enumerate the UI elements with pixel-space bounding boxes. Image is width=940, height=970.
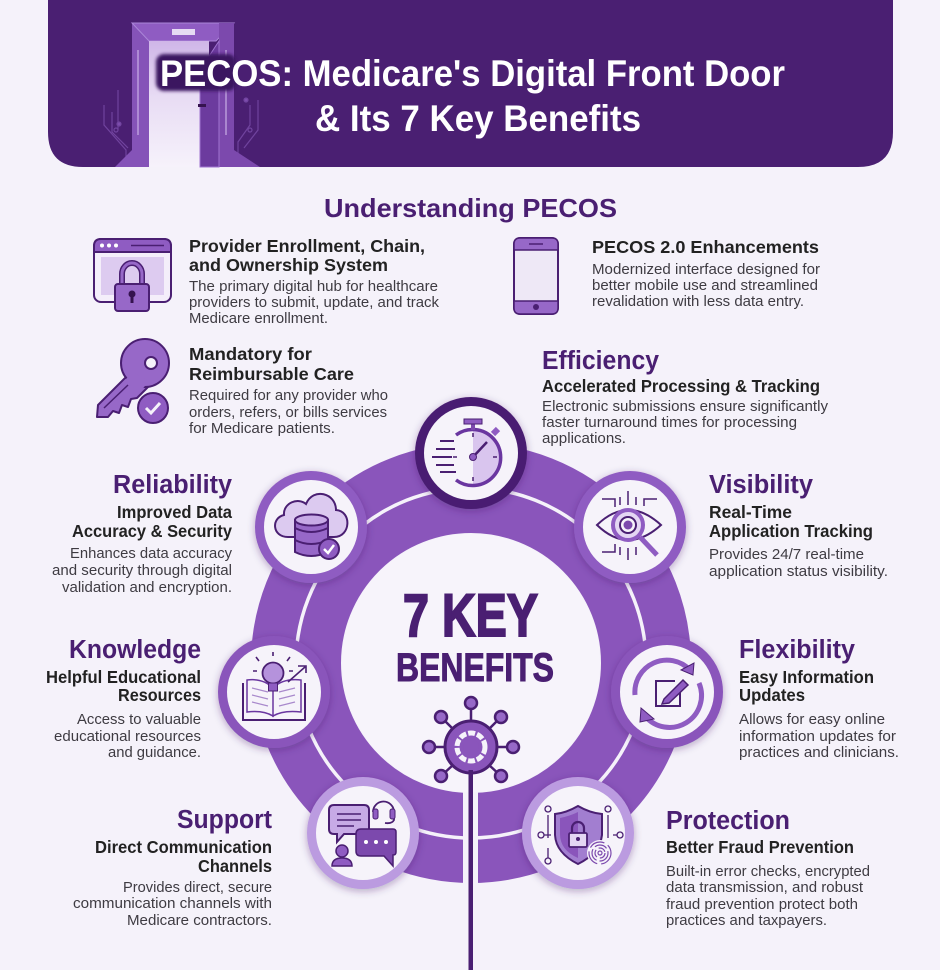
text: flexibility: practices and clinicians. xyxy=(739,745,899,761)
icon: stopwatch xyxy=(432,419,501,486)
text: support: Channels xyxy=(198,856,272,876)
text: protection xyxy=(666,807,870,929)
panel: mandatory for reimbursable care xyxy=(97,339,388,437)
text: knowledge: Knowledge xyxy=(69,636,201,664)
text: provider enrollment: Medicare enrollment. xyxy=(189,311,328,327)
text: reliability: validation and encryption. xyxy=(62,580,232,596)
text: provider enrollment: The primary digital hub for healthcare xyxy=(189,279,438,295)
text: mandatory: Mandatory for xyxy=(189,344,312,364)
text: knowledge: educational resources xyxy=(54,729,201,745)
text: knowledge: and guidance. xyxy=(108,745,201,761)
text: visibility: application status visibility. xyxy=(709,564,888,580)
text: PECOS 2.0 enhancements: Modernized interface designed for xyxy=(592,262,820,278)
text: support: Medicare contractors. xyxy=(127,913,272,929)
text: knowledge: Resources xyxy=(118,685,201,705)
text: efficiency: Efficiency xyxy=(542,347,660,375)
text: knowledge xyxy=(46,636,201,761)
text: mandatory: Required for any provider who xyxy=(189,388,388,404)
node: visibility eye xyxy=(578,476,682,578)
text: PECOS 2.0 enhancements xyxy=(592,237,820,310)
header banner xyxy=(48,0,893,167)
icon: open book with lightbulb xyxy=(243,652,306,720)
text: protection: Protection xyxy=(666,807,790,835)
icon: central hub and stem xyxy=(423,697,519,970)
text: efficiency: faster turnaround times for processing xyxy=(542,415,797,431)
text: reliability: and security through digital xyxy=(52,563,232,579)
text: flexibility: information updates for xyxy=(739,729,896,745)
center label: 7 key benefits xyxy=(396,582,554,690)
text: provider enrollment: providers to submit, update, and track xyxy=(189,295,440,311)
text: provider enrollment: and Ownership System xyxy=(189,255,388,275)
text: protection: data transmission, and robust xyxy=(666,880,863,896)
node: knowledge book xyxy=(222,640,326,744)
text: reliability xyxy=(52,471,233,596)
text: efficiency: applications. xyxy=(542,431,626,447)
text: PECOS 2.0 enhancements: PECOS 2.0 Enhancements xyxy=(592,237,819,257)
text: support: Support xyxy=(177,806,272,834)
text: efficiency: Accelerated Processing & Tracking xyxy=(542,376,820,396)
text: PECOS 2.0 enhancements: revalidation with less data entry. xyxy=(592,294,804,310)
icon: key with check xyxy=(97,339,169,423)
text: support: Direct Communication xyxy=(95,837,272,857)
text: reliability: Reliability xyxy=(113,471,233,499)
node: support chat xyxy=(312,782,414,884)
text: visibility: Real-Time xyxy=(709,502,792,522)
text: knowledge: Access to valuable xyxy=(77,712,201,728)
title: PECOS: Medicare's Digital Front Door xyxy=(160,53,785,94)
text: visibility xyxy=(709,471,888,580)
text: support: Provides direct, secure xyxy=(123,880,272,896)
text: protection: Built-in error checks, encrypted xyxy=(666,864,870,880)
node: protection shield xyxy=(526,782,630,884)
title backing behind PECOS xyxy=(156,54,236,91)
text: protection: fraud prevention protect both xyxy=(666,897,858,913)
text: mandatory: for Medicare patients. xyxy=(189,421,335,437)
text: reliability: Accuracy & Security xyxy=(72,521,232,541)
panel: PECOS 2.0 enhancements xyxy=(514,237,820,314)
center label: 7 key benefits: 7 KEY xyxy=(403,582,538,649)
icon: browser window with padlock xyxy=(94,239,171,311)
text: flexibility: Easy Information xyxy=(739,667,874,687)
text: protection: practices and taxpayers. xyxy=(666,913,827,929)
text: PECOS 2.0 enhancements: better mobile use and streamlined xyxy=(592,278,818,294)
icon: chat bubbles and agent xyxy=(329,802,396,866)
text: reliability: Improved Data xyxy=(117,502,232,522)
text: mandatory: orders, refers, or bills services xyxy=(189,405,387,421)
text: efficiency: Electronic submissions ensure significantly xyxy=(542,399,829,415)
heading: Understanding PECOS: Understanding PECOS xyxy=(324,193,617,223)
icon: shield, padlock and fingerprint xyxy=(538,806,623,866)
text: visibility: Visibility xyxy=(709,471,814,499)
node: flexibility refresh xyxy=(616,640,718,744)
icon: refresh arrows with edit pencil xyxy=(635,660,702,727)
icon: digital door xyxy=(104,23,260,167)
title: & Its 7 Key Benefits xyxy=(315,98,641,139)
text: visibility: Provides 24/7 real-time xyxy=(709,547,864,563)
text: reliability: Enhances data accuracy xyxy=(70,546,233,562)
node: efficiency stopwatch xyxy=(420,402,522,504)
icon: cloud database xyxy=(275,494,347,559)
text: protection: Better Fraud Prevention xyxy=(666,837,854,857)
text: support xyxy=(73,806,272,929)
text: visibility: Application Tracking xyxy=(709,521,873,541)
benefits ring xyxy=(296,488,646,890)
title xyxy=(160,53,785,139)
text: flexibility: Allows for easy online xyxy=(739,712,885,728)
center label: 7 key benefits: BENEFITS xyxy=(396,646,554,690)
text: provider enrollment xyxy=(189,236,440,327)
icon: smartphone xyxy=(514,238,558,314)
text: flexibility xyxy=(739,636,899,761)
text: support: communication channels with xyxy=(73,896,272,912)
node: reliability cloud xyxy=(260,476,362,578)
text: flexibility: Updates xyxy=(739,685,805,705)
text: flexibility: Flexibility xyxy=(739,636,856,664)
text: mandatory xyxy=(189,344,388,437)
text: knowledge: Helpful Educational xyxy=(46,667,201,687)
icon: eye with magnifier xyxy=(597,491,661,560)
text: efficiency xyxy=(542,347,829,447)
panel: provider enrollment xyxy=(94,236,440,327)
text: mandatory: Reimbursable Care xyxy=(189,364,354,384)
text: provider enrollment: Provider Enrollment, Chain, xyxy=(189,236,425,256)
